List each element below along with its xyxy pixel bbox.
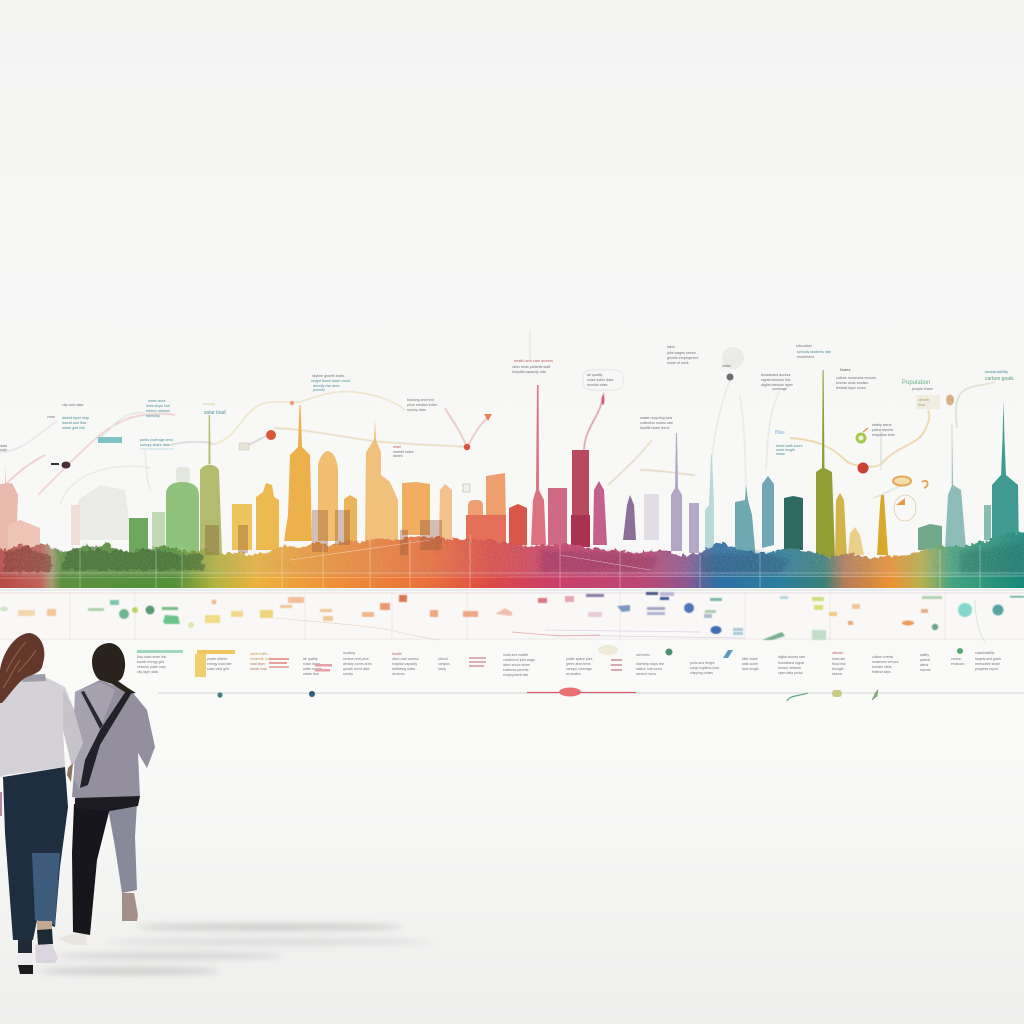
note: n: schools students rate (797, 350, 831, 354)
text block 3: road layer (250, 662, 266, 666)
note: a: transit and flow (62, 421, 87, 425)
note: m: signal sensors link (761, 378, 791, 382)
icon: green ring (856, 428, 868, 444)
note: c: parks coverage area (140, 438, 173, 442)
tower: pale ghost buildings (75, 485, 132, 540)
tower: gold pale with spire (365, 420, 398, 541)
note: f (407, 398, 437, 412)
tower: gold small (344, 495, 357, 541)
note: left edge: data (0, 444, 7, 448)
note: d (203, 401, 226, 416)
black front leg (72, 804, 110, 935)
text block 5: density zones area (343, 662, 372, 666)
text block 4: water usage (303, 667, 322, 671)
note: h: hospital capacity rate (512, 370, 546, 374)
tower: green block (129, 518, 148, 556)
text block 14: drought (832, 667, 844, 671)
note: n: enrollment (797, 355, 814, 359)
note: r teal: sustainability (985, 369, 1008, 374)
text block 8: employment rate (503, 673, 528, 677)
text block 14 (832, 651, 846, 676)
gray rear leg (108, 803, 137, 893)
note: d: solar load (204, 410, 226, 416)
note: p green (902, 380, 933, 391)
text block 11: shipping routes (690, 671, 713, 675)
text block 16: patrols (920, 658, 930, 662)
note: t (872, 423, 895, 437)
tower: rose with spire (531, 385, 546, 545)
note: q pale yellow: climate (918, 398, 929, 402)
text block 5: survey (343, 672, 353, 676)
text block 10: service hours (636, 672, 656, 676)
text block 17: emission (951, 662, 964, 666)
text block 2 (195, 650, 235, 677)
note: o: events visits tourism (836, 381, 868, 385)
text block 9: canopy coverage (566, 667, 592, 671)
person: right figure (58, 643, 155, 945)
lighter denim lower leg (32, 853, 60, 925)
text block 6: health (392, 652, 402, 656)
tower: dark green (784, 496, 803, 550)
note: r teal: carbon goals (985, 376, 1014, 382)
note: m (761, 373, 794, 391)
tower: pink left (0, 465, 18, 550)
hand (67, 763, 73, 782)
text block 6: services (392, 672, 405, 676)
note: k: growth employment (667, 356, 698, 360)
text block 7: study (438, 667, 446, 671)
note: e: permits (313, 388, 325, 392)
note: k: share of work (667, 361, 689, 365)
tower: olive with tall spire (816, 370, 835, 558)
skyline: foreground silhouette and colour band (0, 510, 1024, 588)
text block 15: museums venues (872, 660, 899, 664)
band: green dark trees (60, 546, 205, 570)
text block 12: lane length (742, 667, 759, 671)
icon: small orange node (290, 401, 294, 405)
text block 13 (778, 655, 805, 675)
marker: navy dot (309, 691, 315, 697)
tower: yellow stepped (256, 483, 279, 550)
tower: pink low (8, 520, 40, 548)
text block 8: business permits (503, 668, 529, 672)
text block 10: ridership stops line (636, 662, 664, 666)
note: b (146, 399, 170, 418)
note: b: lines stops hub (146, 404, 170, 408)
text block 10: rail metro (636, 653, 650, 657)
text block 15 (872, 655, 899, 674)
sweater (0, 677, 83, 777)
left wrist (0, 792, 2, 816)
text block 5 (343, 651, 372, 676)
front shoe (58, 934, 87, 945)
text block 11: ports and freight (690, 661, 715, 665)
note: m: coverage (772, 387, 787, 391)
tower: pale lilac (644, 494, 659, 540)
icon: orange swirl (893, 476, 928, 488)
text block 8: commerce jobs wage (503, 658, 535, 662)
jacket (72, 680, 155, 798)
note: k: jobs wages sector (666, 351, 697, 355)
second strap (81, 691, 103, 729)
text block 10 (636, 648, 672, 676)
text block 15: culture events (872, 655, 893, 659)
note: e: height floors tower count (311, 379, 350, 383)
text block 11 (690, 650, 733, 675)
text block 17: sustainability (975, 651, 995, 655)
note: k: labor (667, 345, 676, 349)
marker: olive bud (832, 690, 842, 697)
marker: pink bar and bulge (527, 688, 636, 696)
figures (0, 633, 155, 974)
note: q pale yellow: heat (918, 403, 925, 407)
note: e: density rise area (313, 384, 339, 388)
tower: mustard (835, 493, 847, 558)
text block 17: progress report (975, 667, 998, 671)
text block 6: hospital capacity (392, 662, 417, 666)
text block 2: solar wind grid (207, 667, 229, 671)
icon: orange node (484, 414, 492, 421)
note: q pale yellow (916, 395, 940, 409)
note: t: patrol reports (872, 428, 893, 432)
band: dark building shadows (205, 510, 442, 555)
text block 9: recreation (566, 672, 581, 676)
rear shoe (122, 893, 138, 921)
hair (92, 643, 136, 694)
note: c (140, 438, 174, 449)
band: solid base (0, 566, 1024, 588)
note: g (393, 445, 414, 458)
note: n: education (796, 344, 812, 348)
data strip: lower text blocks (137, 645, 1001, 677)
band: red dark trees left (3, 545, 53, 572)
tower: steel blue (762, 476, 774, 548)
text block 3: street traffic (250, 652, 268, 656)
note: f: price median index (407, 403, 437, 407)
text block 4: air quality (303, 657, 318, 661)
text block 1: network pulse map (137, 665, 166, 669)
marker: green leaf (872, 690, 878, 700)
icon: small tag (239, 443, 249, 450)
text block 17 (951, 651, 1001, 671)
tower: pale peach (71, 505, 80, 545)
text block 3: commute route (250, 657, 273, 661)
note: k (666, 345, 698, 365)
note: l pale bubble (722, 347, 744, 369)
person: left figure (0, 633, 83, 974)
text block 7: school (438, 657, 448, 661)
strip icons (0, 592, 1024, 640)
tower: gold with spire (284, 405, 312, 541)
text block 13: open data portal (778, 671, 803, 675)
sweater shade (63, 690, 83, 767)
note: o (836, 367, 876, 390)
left ankle and shoe (17, 940, 33, 974)
note: s blue: route length (776, 448, 795, 452)
tower: gold spike (877, 495, 888, 555)
text block 5: census rent price (343, 657, 369, 661)
tower: rose slab (548, 488, 567, 545)
band: white grid lines (0, 535, 1024, 588)
text block 14: storms (832, 672, 842, 676)
text block 12: walk score (742, 662, 758, 666)
tower: olive with spire (200, 415, 222, 555)
note: b: station network (146, 409, 170, 413)
icon: pink hook head (602, 395, 604, 405)
note: a: city core data (62, 403, 83, 407)
skyline: background towers (0, 370, 1019, 560)
note: a: urban grid link (62, 426, 85, 430)
text block 14: climate (832, 651, 843, 655)
note: f: housing and rent (407, 398, 434, 402)
note: e: skyline growth index (312, 374, 345, 378)
text block 5: growth trend data (343, 667, 370, 671)
tower: big green (166, 482, 199, 555)
note: h: health and care access (514, 359, 553, 363)
text block 17: carbon (951, 657, 961, 661)
tower: pale teal spire (705, 455, 714, 548)
tower: teal slab (918, 524, 942, 550)
connector lines (0, 330, 995, 505)
note: left edge (0, 444, 7, 452)
text block 6: clinic care access (392, 657, 419, 661)
text block 4 (303, 657, 332, 676)
note: j: collection routes rate (640, 421, 673, 425)
note: n (796, 344, 831, 359)
pants (3, 767, 68, 940)
tower: teal narrow (984, 505, 991, 540)
icon: red node (464, 444, 470, 450)
text block 5: housing (343, 651, 355, 655)
note: s blue (775, 430, 803, 456)
strip background (0, 588, 1024, 640)
collar (22, 674, 46, 682)
tower: lavender (689, 503, 699, 553)
text block 6: wellbeing index (392, 667, 415, 671)
note: s blue: share (776, 452, 785, 456)
black hem (75, 796, 140, 811)
note: s blue: Bike (775, 430, 785, 436)
note: c: canopy share data (140, 443, 170, 447)
text block 9: public space park (566, 657, 593, 661)
text block 4: waste flow (303, 672, 319, 676)
tower: pale gold (848, 527, 864, 555)
note: t: response time (872, 433, 895, 437)
text block 1: city layer data (137, 670, 158, 674)
text block 16 (920, 648, 963, 672)
note: o: festival days count (836, 386, 866, 390)
note: s blue: lanes walk score (776, 444, 803, 448)
text block 8: labor sector share (503, 663, 530, 667)
text block 9 (566, 645, 622, 676)
note: e (311, 374, 350, 392)
silhouette: rough rooftops (0, 530, 1024, 600)
text block 7: campus (438, 662, 450, 666)
note: teal tag (98, 437, 122, 443)
note: t: safety alerts (872, 423, 892, 427)
note: i: monitor sites (587, 383, 608, 387)
note: a: district layer map (62, 416, 89, 420)
text block 2: energy load rate (207, 662, 232, 666)
note: a: zone (47, 415, 55, 419)
note: h: clinic beds patients staff (512, 365, 550, 369)
tower: light green (152, 512, 165, 556)
marker: teal dot (217, 692, 223, 698)
jacket highlight (74, 682, 115, 790)
text block 1: transit energy grid (137, 660, 164, 664)
note: f: survey data (407, 408, 426, 412)
note: p green: Population (902, 380, 930, 386)
tower: salmon low (468, 500, 483, 525)
data strip: upper panel (0, 588, 1024, 642)
tower: teal with spire (992, 400, 1019, 556)
hair (0, 633, 44, 703)
band: speckled texture (0, 528, 1024, 576)
text block 9: green area trees (566, 662, 591, 666)
note: o: Notes (840, 367, 850, 372)
note: b: metro area (148, 399, 165, 403)
note: left edge: note (0, 448, 7, 452)
note: j: landfill share trend (640, 426, 669, 430)
tower: salmon (486, 473, 506, 522)
note: d: energy (203, 401, 215, 406)
text block 14: heat rain (832, 657, 845, 661)
text block 7 (438, 657, 486, 671)
text block 16: reports (920, 668, 931, 672)
ground shadows (40, 924, 435, 974)
text block 6 (392, 652, 419, 676)
note: p green: people share (912, 387, 933, 391)
note: m: digital network layer (761, 383, 794, 387)
text block 11: cargo logistics load (690, 666, 719, 670)
icons on the connector lines (51, 374, 954, 521)
tower: crimson base (571, 515, 590, 547)
text block 1 (137, 650, 183, 674)
text block 3: transit map (250, 667, 267, 671)
text block 8 (503, 653, 535, 677)
tower: magenta (593, 481, 607, 545)
text block 17: targets and goals (975, 657, 1001, 661)
tower: red low (466, 515, 506, 555)
note: j (640, 416, 673, 430)
icon: outlined circle with marker (894, 495, 916, 521)
note: g: retail (393, 445, 401, 449)
icon: red circle cluster (858, 462, 868, 474)
text block 16: safety (920, 653, 929, 657)
text block 2: power district (207, 657, 227, 661)
tower: crimson top (572, 450, 589, 520)
text block 15: festival days (872, 670, 891, 674)
note: a (47, 403, 89, 430)
note: m: broadband access (761, 373, 791, 377)
text block 12 (742, 657, 759, 671)
icon: small outline tag (463, 484, 470, 492)
tower: pale top behind green (176, 467, 190, 483)
icon: dark binocular glyph (51, 462, 70, 468)
tower: purple taper (623, 495, 636, 540)
notes above skyline (0, 344, 1014, 458)
text block 16: alerts (920, 663, 929, 667)
note: b: ridership (146, 414, 160, 418)
note: j: waste recycling tons (640, 416, 673, 420)
text block 1: flow data urban link (137, 655, 167, 659)
tower: peach narrow (439, 484, 452, 540)
text block 12: bike share (742, 657, 758, 661)
note: r teal (985, 369, 1014, 382)
text block 14: flood risk (832, 662, 846, 666)
note: l pale bubble: water (722, 364, 732, 368)
text block 13: digital access rate (778, 655, 805, 659)
text block 10: station hub count (636, 667, 662, 671)
note: i (583, 370, 623, 390)
note: h (512, 359, 553, 374)
hair highlights (3, 642, 36, 688)
tower: orange wide (402, 482, 430, 535)
right ankle and shoe (35, 921, 58, 963)
note: g: market sales (393, 450, 414, 454)
text block 13: broadband signal (778, 661, 804, 665)
text block 17: renewable share (975, 662, 1000, 666)
timeline with markers (158, 688, 1024, 701)
text block 8: retail and market (503, 653, 528, 657)
tower: teal cluster (735, 485, 756, 560)
text block 13: sensor network (778, 666, 801, 670)
icon: red circle (266, 430, 276, 440)
icon: grey node (726, 374, 734, 380)
text block 3 (250, 652, 289, 671)
icon: tan emblem (946, 394, 954, 406)
tower: gold rounded (318, 451, 338, 541)
note: i: noise index data (587, 378, 613, 382)
text block 4: noise index (303, 662, 320, 666)
bag strap (80, 691, 131, 788)
band: crimson and blue shade (540, 542, 1024, 574)
marker: green squiggle (787, 693, 808, 701)
note: g: stores (393, 454, 403, 458)
tower: yellow block (232, 504, 252, 550)
tower: red (509, 504, 527, 545)
note: o: culture museums venues (836, 376, 876, 380)
tower: pale teal with spire (945, 440, 966, 548)
note: i: air quality (587, 373, 603, 377)
tower: lavender with spire (671, 433, 682, 551)
text block 15: tourism visits (872, 665, 892, 669)
